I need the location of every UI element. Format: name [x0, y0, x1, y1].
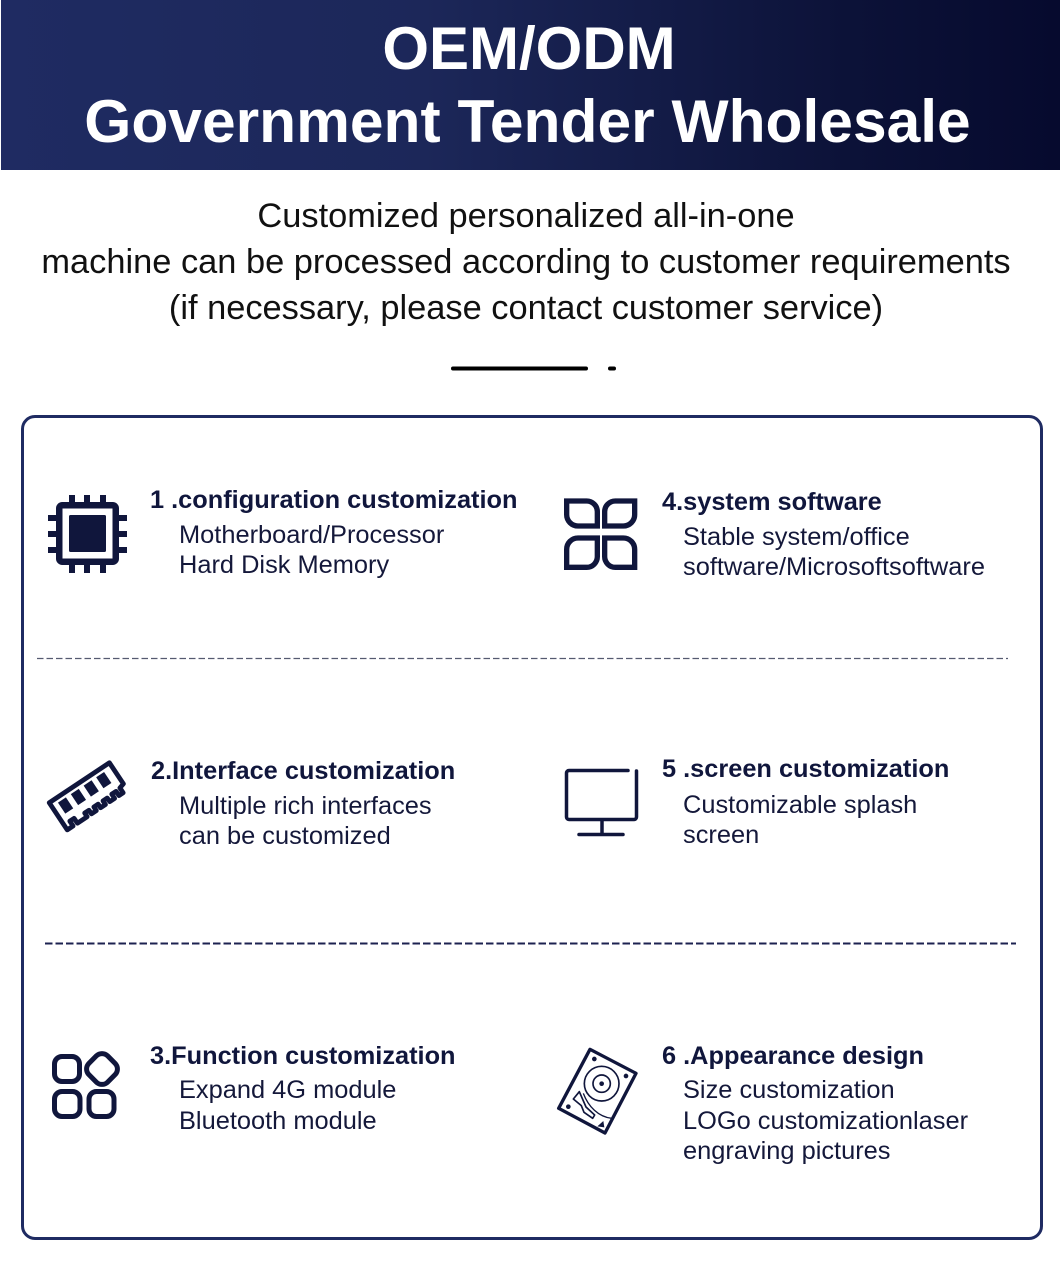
- description: engraving pictures: [683, 1137, 890, 1165]
- description: [179, 792, 432, 850]
- description: screen: [683, 821, 759, 849]
- description: Multiple rich interfaces: [179, 792, 432, 820]
- description: can be customized: [179, 822, 391, 850]
- icon: hard disk: [556, 1048, 638, 1135]
- description: Hard Disk Memory: [179, 551, 389, 579]
- subtitle text: machine can be processed according to customer requirements: [41, 243, 1011, 281]
- description: [179, 1076, 396, 1134]
- heading: 5 .screen customization: [662, 755, 949, 783]
- subtitle text: (if necessary, please contact customer service): [169, 289, 883, 327]
- decorative short line and dot: [451, 366, 616, 370]
- subtitle text: Customized personalized all-in-one: [257, 197, 795, 235]
- subtitle text: [41, 197, 1011, 327]
- header banner: [1, 0, 1060, 170]
- item 1: configuration customization: [48, 486, 518, 579]
- description: LOGo customizationlaser: [683, 1106, 968, 1134]
- description: Stable system/office: [683, 522, 910, 550]
- description: Bluetooth module: [179, 1106, 377, 1134]
- description: software/Microsoftsoftware: [683, 553, 985, 581]
- icon: app grid: [52, 1051, 120, 1119]
- heading: 3.Function customization: [150, 1042, 456, 1070]
- icon: chip: [48, 495, 127, 573]
- description: Expand 4G module: [179, 1076, 396, 1104]
- item 2: interface customization: [46, 757, 455, 850]
- heading: 4.system software: [662, 488, 882, 516]
- item 6: appearance design: [556, 1042, 968, 1165]
- heading: 6 .Appearance design: [662, 1042, 924, 1070]
- heading: 2.Interface customization: [151, 757, 455, 785]
- icon: memory module: [46, 760, 126, 832]
- main panel frame: [21, 415, 1043, 1240]
- description: [683, 790, 917, 849]
- item 3: function customization: [52, 1042, 456, 1134]
- description: [179, 520, 444, 579]
- icon: four petals: [564, 498, 638, 570]
- description: Motherboard/Processor: [179, 520, 444, 548]
- heading: 1 .configuration customization: [150, 486, 518, 514]
- title line 2: Government Tender Wholesale: [84, 87, 971, 155]
- item 4: system software: [564, 488, 985, 581]
- icon: monitor: [564, 768, 638, 836]
- description: Size customization: [683, 1076, 895, 1104]
- description: [683, 522, 985, 581]
- title line 1: OEM/ODM: [382, 15, 676, 82]
- item 5: screen customization: [564, 755, 949, 849]
- description: Customizable splash: [683, 790, 917, 818]
- description: [683, 1076, 968, 1165]
